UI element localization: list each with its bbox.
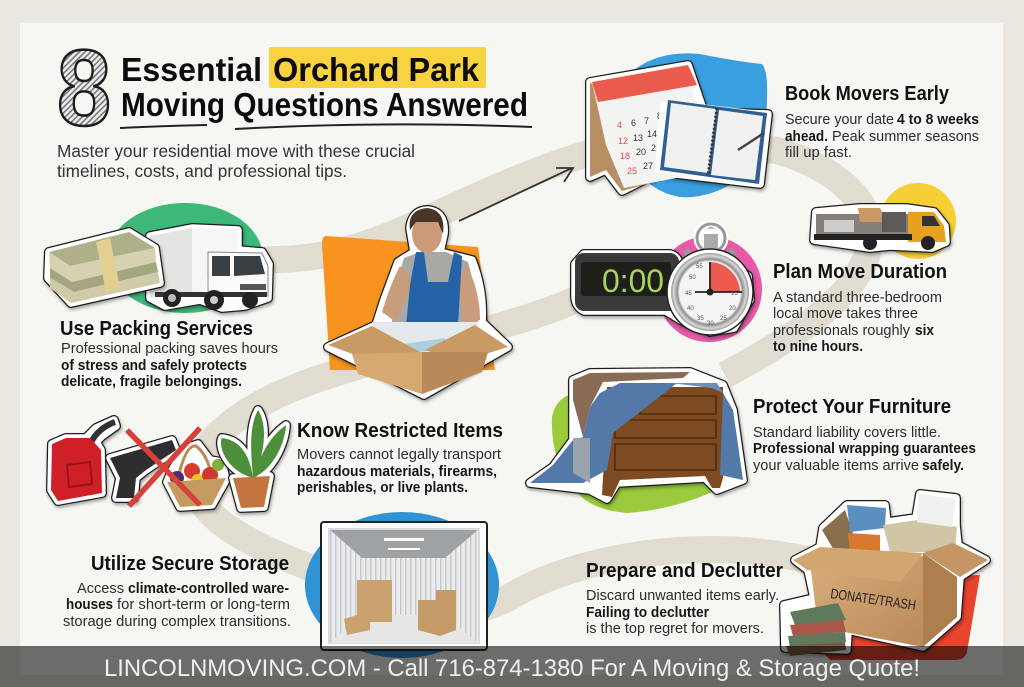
panel: worker packing xyxy=(322,208,508,395)
heading: book movers early: Book Movers Early xyxy=(785,83,950,105)
heading: know restricted items: Know Restricted Items xyxy=(297,420,503,442)
text: plan move duration: professionals roughly xyxy=(773,323,911,339)
text: use packing services xyxy=(61,341,278,390)
notebook xyxy=(655,100,768,184)
heading: protect your furniture: Protect Your Furniture xyxy=(753,396,951,418)
icon: desk calendar: 21 xyxy=(651,143,661,153)
text: plan move duration xyxy=(773,290,942,355)
text: book movers early: fill up fast. xyxy=(785,145,852,161)
icon: dresser under blankets xyxy=(530,372,743,499)
text: book movers early xyxy=(785,112,979,161)
subtitle: Master your residential move with these crucial xyxy=(57,141,415,161)
title line two: Moving Questions Answered xyxy=(121,86,528,123)
icon: desk calendar: 7 xyxy=(644,116,649,126)
title line one: Orchard Park xyxy=(273,51,480,88)
text: book movers early: ahead. xyxy=(785,129,828,145)
text: plan move duration: A standard three-bedroom xyxy=(773,290,942,306)
icon: desk calendar xyxy=(590,65,768,191)
icon: stopwatch: 30 xyxy=(707,321,714,327)
icon: red cross xyxy=(127,428,200,506)
text: utilize secure storage: for short-term or long-term xyxy=(117,597,290,613)
icon: stopwatch xyxy=(667,224,753,335)
panel: calendar illustration xyxy=(590,53,768,197)
icon: stopwatch: 25 xyxy=(720,316,727,322)
text: prepare and declutter: Discard unwanted items early. xyxy=(586,588,779,604)
heading: plan move duration: Plan Move Duration xyxy=(773,261,947,283)
icon: fruit basket xyxy=(167,444,226,507)
panel: declutter illustration xyxy=(784,494,988,660)
icon: desk calendar: 18 xyxy=(620,151,630,161)
icon: desk calendar: 25 xyxy=(627,166,637,176)
text: protect your furniture: your valuable items arrive xyxy=(753,458,919,474)
icon: stopwatch: 55 xyxy=(696,264,703,270)
icon: digital clock: 0:00 xyxy=(602,263,664,299)
text: protect your furniture: safely. xyxy=(922,458,964,474)
text: prepare and declutter xyxy=(586,588,779,637)
icon: worker and box xyxy=(328,208,508,395)
text: protect your furniture xyxy=(753,425,976,474)
icon: desk calendar: 4 xyxy=(617,120,622,130)
text: protect your furniture: Professional wrapping guarantees xyxy=(753,441,976,457)
icon: stopwatch: 40 xyxy=(687,306,694,312)
text: book movers early: 4 to 8 weeks xyxy=(897,112,979,128)
icon: donate box xyxy=(784,494,988,656)
red shape xyxy=(812,575,980,660)
icon: stopwatch: 45 xyxy=(685,291,692,297)
title underline xyxy=(120,124,532,129)
icon: digital clock xyxy=(575,232,750,332)
text: plan move duration: to nine hours. xyxy=(773,339,863,355)
heading: utilize secure storage: Utilize Secure Storage xyxy=(91,553,289,575)
panel: furniture illustration xyxy=(530,372,743,513)
icon: flatbed truck xyxy=(814,208,946,250)
blue blob xyxy=(305,512,499,658)
icon: desk calendar: 27 xyxy=(643,161,653,171)
icon: stopwatch: 50 xyxy=(689,275,696,281)
subtitle: timelines, costs, and professional tips. xyxy=(57,161,347,181)
text: plan move duration: local move takes three xyxy=(773,306,918,322)
books xyxy=(786,603,846,656)
text: know restricted items: Movers cannot legally transport xyxy=(297,447,501,463)
text: utilize secure storage: climate-controlled ware- xyxy=(128,581,289,597)
icon: jerry can xyxy=(51,420,116,501)
heading: prepare and declutter: Prepare and Declutter xyxy=(586,560,783,582)
text: prepare and declutter: Failing to declutter xyxy=(586,605,709,621)
text: utilize secure storage: storage during complex transitions. xyxy=(63,614,291,630)
blue blob xyxy=(630,53,767,197)
text: utilize secure storage: Access xyxy=(77,581,124,597)
numeral 8: 8 xyxy=(57,27,111,148)
title line one: Essential xyxy=(121,51,262,88)
icon: desk calendar: 20 xyxy=(636,147,646,157)
icon: handgun xyxy=(110,440,176,498)
panel: packing services illustration xyxy=(48,203,269,313)
icon: stopwatch: 20 xyxy=(729,306,736,312)
label on box: DONATE/TRASH xyxy=(830,585,917,613)
heading: use packing services: Use Packing Services xyxy=(60,318,253,340)
orange blob xyxy=(322,236,495,370)
panel: restricted items illustration xyxy=(51,410,286,508)
pink circle xyxy=(656,236,762,342)
title block xyxy=(57,27,532,148)
text: utilize secure storage: houses xyxy=(66,597,113,613)
footer banner xyxy=(0,646,1024,687)
icon: stacks of cash xyxy=(48,232,160,303)
banner text: LINCOLNMOVING.COM - Call 716-874-1380 For A Moving & Storage Quote! xyxy=(104,655,920,682)
icon: storage unit xyxy=(321,522,487,650)
icon: desk calendar: 14 xyxy=(647,129,657,139)
text: utilize secure storage xyxy=(63,581,291,630)
text: know restricted items: perishables, or live plants. xyxy=(297,480,468,496)
text: use packing services: of stress and safely protects xyxy=(61,358,247,374)
yellow circle xyxy=(880,183,956,259)
icon: desk calendar: 13 xyxy=(633,133,643,143)
icon: desk calendar: 6 xyxy=(631,118,636,128)
icon: stopwatch: 15 xyxy=(731,291,738,297)
icon: potted plant xyxy=(221,410,286,508)
panel: flatbed truck illustration xyxy=(814,183,956,259)
panel: storage unit illustration xyxy=(305,512,499,658)
text: plan move duration: six xyxy=(915,323,934,339)
icon: desk calendar: 12 xyxy=(618,136,628,146)
icon: desk calendar: 8 xyxy=(657,111,662,121)
arrow xyxy=(459,168,573,221)
text: know restricted items: hazardous materials, firearms, xyxy=(297,464,497,480)
text: protect your furniture: Standard liability covers little. xyxy=(753,425,941,441)
text: prepare and declutter: is the top regret for movers. xyxy=(586,621,764,637)
subtitle xyxy=(57,141,415,181)
lime blob xyxy=(552,392,740,513)
text: know restricted items xyxy=(297,447,501,496)
icon: moving truck xyxy=(150,228,269,310)
text: use packing services: Professional packing saves hours xyxy=(61,341,278,357)
text: use packing services: delicate, fragile belongings. xyxy=(61,374,242,390)
green blob xyxy=(107,203,263,313)
icon: stopwatch: 35 xyxy=(697,316,704,322)
winding path xyxy=(195,150,870,612)
panel: clock and stopwatch illustration xyxy=(575,224,762,342)
text: book movers early: Peak summer seasons xyxy=(832,129,979,145)
text: book movers early: Secure your date xyxy=(785,112,894,128)
highlight behind Orchard Park xyxy=(269,47,486,88)
